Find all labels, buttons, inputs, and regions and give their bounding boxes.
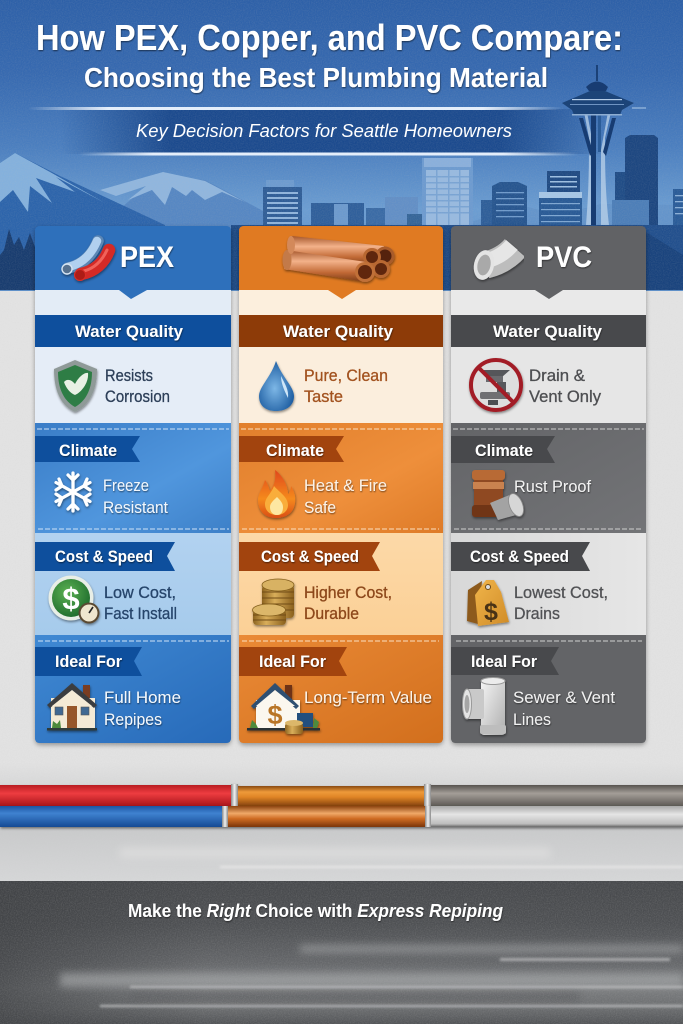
Copper row: climate: Climate (266, 442, 324, 460)
title (36, 17, 623, 93)
Copper strip (239, 290, 443, 315)
footer streaks (0, 881, 683, 1024)
PVC row: climate (451, 423, 646, 533)
icon: no drinking water (471, 360, 521, 410)
PVC row: ideal for: Lines (513, 711, 551, 729)
PEX row: water quality (35, 315, 231, 423)
icon: flame (258, 470, 295, 518)
PVC row: ideal for: Ideal For (471, 653, 538, 671)
PVC header (451, 226, 646, 290)
PVC row: cost and speed: Lowest Cost, (514, 584, 608, 602)
PVC row: climate: Climate (475, 442, 533, 460)
PVC row: ideal for: Sewer & Vent (513, 689, 615, 707)
icon: price tag: $ (484, 598, 498, 626)
PEX row: climate (35, 423, 231, 533)
icon: snowflake (56, 473, 90, 511)
Copper row: water quality: Pure, Clean (304, 367, 388, 385)
PEX row: climate: Climate (59, 442, 117, 460)
grain (0, 0, 683, 290)
icon: house with dollar and coins (247, 683, 320, 734)
icon: coin stacks (252, 579, 294, 625)
PVC row: cost and speed: Drains (514, 605, 560, 623)
background wall (0, 290, 683, 881)
PVC row: water quality (451, 315, 646, 423)
Copper row: water quality: Water Quality (283, 323, 394, 341)
decorative title lines (28, 107, 646, 156)
PEX header: PEX (120, 241, 174, 274)
PEX row: ideal for: Full Home (104, 689, 181, 707)
Copper row: climate: Safe (304, 499, 336, 517)
icon: water drop (259, 361, 294, 411)
subtitle: Key Decision Factors for Seattle Homeowners (136, 120, 512, 141)
icon: PVC tee fitting (462, 678, 506, 735)
PEX row: ideal for: Ideal For (55, 653, 123, 671)
Copper row: water quality: Taste (304, 388, 343, 406)
distant hills (420, 204, 683, 290)
panel: PEX (35, 226, 231, 743)
Copper header (239, 226, 443, 290)
icon: rusted fitting and pipe (472, 470, 527, 520)
PEX row: cost and speed: Low Cost, (104, 584, 176, 602)
PVC row: water quality: Vent Only (529, 388, 602, 406)
PEX row: climate: Freeze (103, 477, 149, 495)
PEX header (35, 226, 231, 290)
icon: copper pipes (282, 236, 394, 282)
Copper row: ideal for: Long-Term Value (304, 689, 432, 707)
header background: Seattle skyline scene (0, 0, 683, 291)
PEX strip (35, 290, 231, 315)
PVC row: climate: Rust Proof (514, 478, 591, 496)
pipes: blue, copper and silver (0, 806, 683, 827)
Copper row: cost and speed (239, 533, 443, 635)
panel: PVC (451, 226, 646, 743)
PEX row: cost and speed: Cost & Speed (55, 548, 153, 566)
Copper row: cost and speed: Higher Cost, (304, 584, 392, 602)
title: Choosing the Best Plumbing Material (84, 62, 548, 93)
PEX row: ideal for: Repipes (104, 711, 162, 729)
panel: Copper (239, 226, 443, 743)
trees (0, 229, 36, 290)
PEX row: ideal for (35, 635, 231, 743)
PVC row: water quality: Drain & (529, 367, 585, 385)
PVC strip (451, 290, 646, 315)
icon: shield (54, 360, 97, 412)
icon: house (47, 683, 97, 730)
PVC header: PVC (536, 241, 592, 274)
PVC row: water quality: Water Quality (493, 323, 603, 341)
icon: price tag (467, 580, 509, 626)
PEX row: water quality: Corrosion (105, 388, 170, 406)
PVC row: cost and speed: Cost & Speed (470, 548, 569, 566)
Copper row: ideal for (239, 635, 443, 743)
PEX row: water quality: Resists (105, 367, 153, 385)
icon: PEX tubes (62, 241, 109, 280)
footer tagline: Make the Right Choice with Express Repiping (128, 900, 503, 921)
PVC row: ideal for (451, 635, 646, 743)
title: How PEX, Copper, and PVC Compare: (36, 17, 623, 58)
Copper row: ideal for: Ideal For (259, 653, 327, 671)
Copper row: climate: Heat & Fire (304, 477, 387, 495)
footer banner (0, 881, 683, 1024)
buildings (263, 135, 683, 290)
icon: house with dollar and coins: $ (267, 700, 283, 730)
Copper row: cost and speed: Durable (304, 605, 359, 623)
icon: Space Needle (562, 65, 634, 225)
mountains (0, 153, 265, 290)
icon: PVC elbow (471, 245, 515, 282)
Copper row: water quality (239, 315, 443, 423)
lower dark skyline base (231, 225, 683, 290)
PEX row: water quality: Water Quality (75, 323, 184, 341)
PEX row: cost and speed (35, 533, 231, 635)
dark subtitle band (60, 109, 610, 154)
PVC row: cost and speed (451, 533, 646, 635)
icon: dollar and stopwatch (48, 576, 100, 624)
Copper row: climate (239, 423, 443, 533)
PEX row: climate: Resistant (103, 499, 168, 517)
PEX row: cost and speed: Fast Install (104, 605, 177, 623)
pipes: red, copper and gray (0, 784, 683, 807)
brushed metal streaks (120, 848, 683, 868)
Copper row: cost and speed: Cost & Speed (261, 548, 359, 566)
icon: dollar and stopwatch: $ (62, 581, 80, 616)
